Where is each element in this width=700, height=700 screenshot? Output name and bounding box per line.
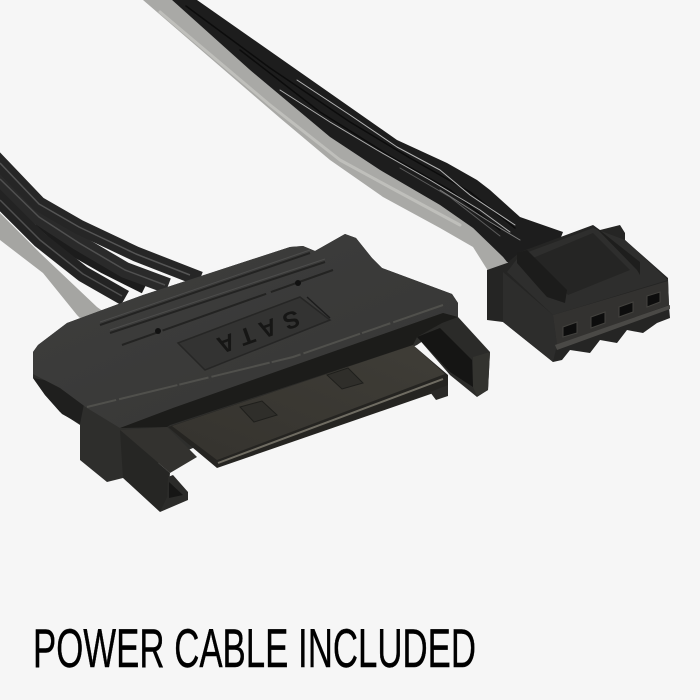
- left wire highlights: [0, 163, 190, 275]
- pin holes: [563, 292, 660, 337]
- left ear wall: [120, 430, 170, 512]
- connector body silhouette: [33, 234, 458, 482]
- blade lower lip: [168, 345, 448, 468]
- left ear top: [120, 427, 197, 473]
- blade notch right: [327, 368, 363, 389]
- pin connector silhouette: [487, 225, 670, 362]
- mold marks: [155, 328, 161, 334]
- contact blade: [168, 345, 448, 468]
- pin connector recess: [533, 233, 630, 295]
- pin connector front face: [553, 281, 669, 345]
- front ledge: [555, 305, 670, 350]
- left black wire upper: [0, 157, 200, 279]
- right ear front: [473, 352, 490, 396]
- right ear: [417, 317, 490, 397]
- gray ribbon highlight: [160, 12, 460, 225]
- left ear: [120, 427, 197, 512]
- blade edge highlight: [218, 379, 443, 463]
- pin connector top face: [507, 228, 668, 315]
- left black wire lower: [0, 194, 125, 298]
- left black wire under: [40, 220, 145, 287]
- right ear interior: [417, 328, 473, 387]
- right latch: [593, 225, 640, 275]
- right ear outer: [417, 317, 490, 397]
- wire highlights: [280, 90, 510, 232]
- plate corner line: [307, 297, 330, 318]
- pin connector side face: [503, 272, 557, 362]
- left gray ribbon wire: [0, 213, 104, 318]
- upper cable bundle: [143, 0, 563, 274]
- left ear foot: [160, 475, 188, 512]
- front edge highlight: [87, 305, 443, 407]
- left latch: [517, 250, 567, 303]
- 4-pin connector: [487, 225, 670, 362]
- wire separators: [186, 6, 515, 228]
- SATA embossed text: SATA: [206, 304, 303, 361]
- blade notch left: [240, 401, 277, 422]
- dark slot: [120, 313, 458, 428]
- black wire band: [172, 0, 563, 262]
- ridged grooves: [100, 250, 333, 345]
- gray ribbon wire: [143, 0, 512, 274]
- left black wire middle: [0, 172, 168, 286]
- SATA label plate: [178, 297, 330, 370]
- SATA connector: [33, 234, 490, 512]
- left side shadow: [33, 378, 84, 424]
- left ear foot hollow: [169, 482, 183, 498]
- left cable bundle: [0, 157, 200, 318]
- blade small tab: [430, 385, 448, 400]
- blade top surface: [172, 345, 445, 460]
- connector top plane: [33, 234, 458, 428]
